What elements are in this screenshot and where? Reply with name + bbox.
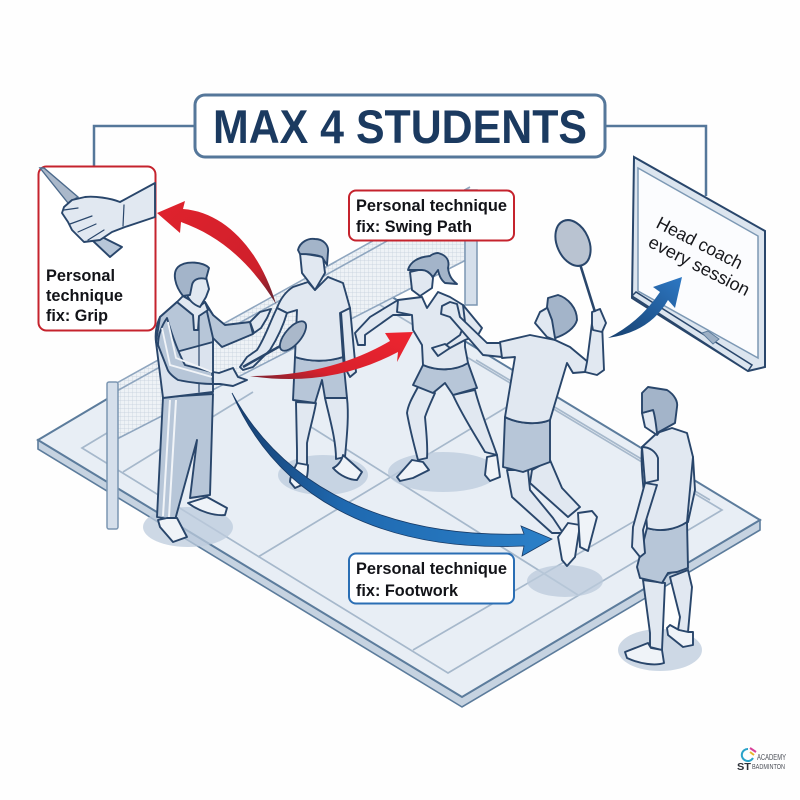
- racket: [549, 215, 597, 312]
- arrow: swing path: [250, 332, 413, 379]
- legs: [296, 402, 316, 466]
- player standing with racket: [240, 239, 362, 488]
- lower arm: [158, 318, 213, 384]
- eraser: [702, 331, 719, 344]
- connector lines from title: [94, 126, 706, 196]
- hair: [642, 387, 677, 433]
- logo: ST: [737, 762, 751, 773]
- head: [642, 410, 665, 435]
- hair: [175, 263, 209, 296]
- near hand: [213, 368, 247, 386]
- arrow: to head coach: [608, 277, 682, 338]
- jacket: [156, 302, 213, 398]
- head: [300, 253, 325, 290]
- whiteboard: [632, 157, 765, 371]
- title box: [195, 95, 605, 157]
- hand on stomach: [432, 344, 450, 356]
- near arm: [240, 308, 287, 370]
- head: [410, 268, 433, 296]
- shorts: [503, 417, 550, 472]
- shirt: [642, 428, 693, 530]
- raised sleeve: [205, 303, 253, 347]
- arrow: footwork: [232, 393, 552, 556]
- callout: footwork: Personal technique: [356, 559, 507, 578]
- whiteboard text: Head coach: [653, 213, 746, 273]
- watching player: [625, 387, 695, 664]
- shoes: [158, 518, 187, 542]
- collar: [177, 296, 208, 330]
- shirt: [397, 292, 473, 369]
- floor shadows: [143, 452, 702, 671]
- shirt: [277, 277, 350, 361]
- grip text: Personal: [46, 266, 115, 285]
- shorts: [637, 522, 688, 583]
- far hand: [250, 309, 271, 333]
- shirt: [500, 335, 588, 423]
- logo: BADMINTON: [752, 764, 785, 771]
- badminton court: [38, 263, 760, 707]
- shoes: [290, 463, 308, 488]
- marker tray: [632, 292, 752, 371]
- shoes: [558, 523, 580, 566]
- shorts: [293, 357, 347, 403]
- coach: [156, 263, 271, 542]
- callout: footwork: [349, 554, 514, 604]
- hair and ponytail: [408, 253, 457, 284]
- zip: [198, 316, 200, 392]
- whiteboard text: every session: [645, 232, 753, 300]
- panel: grip: fix: Grip: [46, 306, 108, 325]
- left arm: [441, 302, 502, 357]
- head: [535, 305, 560, 340]
- logo: ACADEMY: [757, 753, 786, 762]
- callout: swing path: [349, 190, 514, 240]
- legs: [643, 580, 665, 650]
- head: [186, 277, 209, 307]
- logo icon: [742, 748, 756, 761]
- hand: [592, 309, 606, 332]
- far arm: [355, 300, 410, 345]
- jumping player: [441, 215, 606, 566]
- female player: [355, 253, 500, 481]
- racket: [243, 317, 311, 367]
- panel: grip: technique: [46, 286, 123, 305]
- legs: [507, 470, 563, 533]
- far arm: [341, 308, 356, 377]
- icon: hand gripping racket: [40, 168, 155, 257]
- shoes: [625, 643, 664, 664]
- callout: swing path: Personal technique: [356, 196, 507, 215]
- pants: [157, 394, 213, 520]
- title text: MAX 4 STUDENTS: [213, 100, 587, 153]
- near arm: [632, 483, 657, 557]
- callout: footwork: fix: Footwork: [356, 581, 459, 600]
- shoes: [397, 460, 429, 481]
- logo: [737, 748, 786, 773]
- bent arm: [440, 305, 482, 352]
- hair: [298, 239, 328, 265]
- net and posts: [107, 187, 477, 529]
- jacket chest: [156, 302, 213, 355]
- sleeve: [642, 447, 658, 483]
- shorts: [413, 363, 477, 395]
- arrow: grip: [157, 201, 276, 304]
- panel: grip: [38, 166, 156, 330]
- far arm: [685, 457, 695, 522]
- callout: swing path: fix: Swing Path: [356, 217, 472, 236]
- legs: [407, 387, 435, 460]
- raised arm: [585, 323, 604, 375]
- hair: [547, 295, 577, 338]
